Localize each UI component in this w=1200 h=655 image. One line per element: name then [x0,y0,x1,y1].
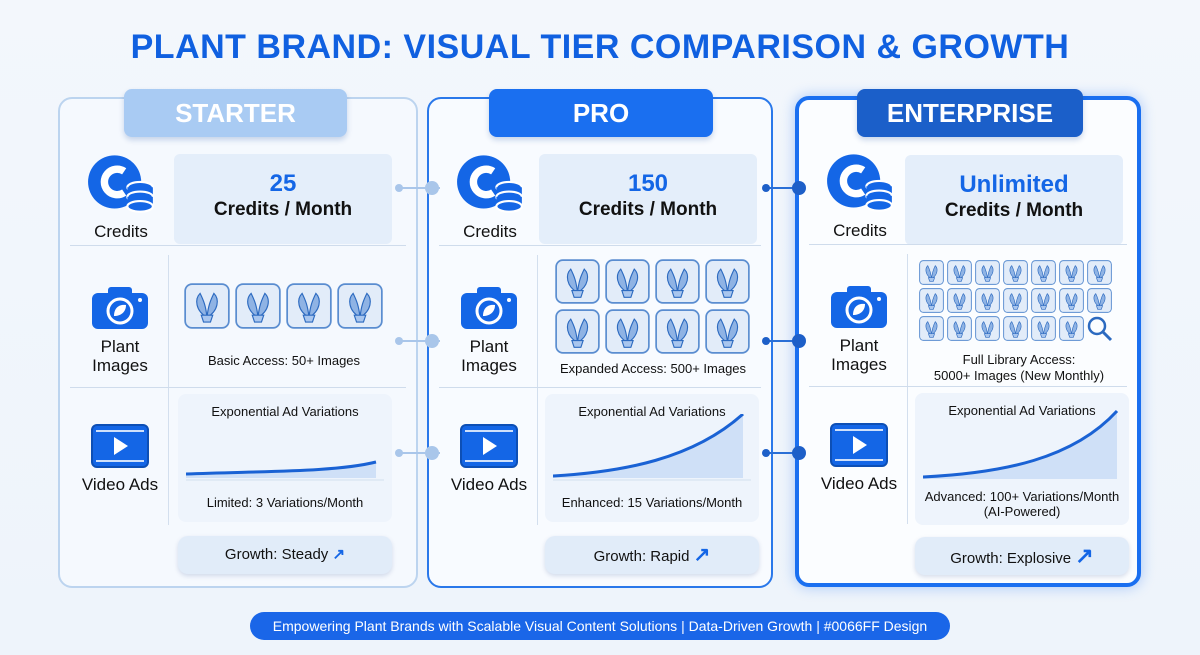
tab: enterprise: ENTERPRISE [887,98,1053,128]
connectors: pro to enterprise [762,181,806,460]
footer banner: Empowering Plant Brands with Scalable Visual Content Solutions | Data-Driven Growth | #0066FF Design [273,618,927,634]
growth: steady: Growth: Steady ↗ [225,546,345,563]
icon: credits [827,154,892,240]
icon: credits: Credits [463,222,517,241]
title: PLANT BRAND: VISUAL TIER COMPARISON & GROWTH [131,28,1069,66]
chart: limited: Limited: 3 Variations/Month [207,495,363,510]
icon: plant images [831,286,887,374]
icon: credits [457,155,522,241]
icon: video ads: Video Ads [451,475,527,494]
tab: starter [124,89,347,137]
chart: enhanced: Enhanced: 15 Variations/Month [562,495,742,510]
icon: plant images [461,287,517,375]
growth: explosive [915,537,1129,575]
icon: video ads: Video Ads [821,474,897,493]
value: 25 credits: Credits / Month [214,199,352,220]
icon: plant images: Images [92,356,148,375]
icon: credits [88,155,154,241]
value: 150 credits: Credits / Month [579,199,717,220]
value: 25 credits: 25 [270,170,296,197]
chart: advanced: Exponential Ad Variations [948,403,1096,418]
chart: limited [178,394,392,522]
chart: enhanced [545,394,759,522]
chart: advanced [915,393,1129,525]
footer banner [250,612,950,640]
icon: credits: Credits [833,221,887,240]
icon: video ads: Video Ads [82,475,158,494]
chart: advanced: Advanced: 100+ Variations/Month [925,489,1119,504]
chart: enhanced: Exponential Ad Variations [578,404,726,419]
value: unlimited credits [905,155,1123,245]
value: 150 credits: 150 [628,170,668,197]
image grid: full library [919,260,1112,383]
connectors: starter to pro [395,181,440,460]
icon: video ads [451,424,527,494]
icon: video ads [82,424,158,494]
tab: pro: PRO [573,98,629,128]
value: unlimited credits: Credits / Month [945,200,1083,221]
icon: video ads [821,423,897,493]
image grid: basic [184,283,383,368]
image grid: expanded: Expanded Access: 500+ Images [560,361,746,376]
growth: rapid [545,536,759,574]
growth: rapid: Growth: Rapid ↗ [594,544,710,566]
tab: enterprise [857,89,1083,137]
icon: plant images [92,287,148,375]
image grid: basic: Basic Access: 50+ Images [208,353,360,368]
image grid: expanded [555,259,750,376]
value: unlimited credits: Unlimited [959,171,1069,198]
tab: starter: STARTER [175,98,296,128]
chart: limited: Exponential Ad Variations [211,404,359,419]
icon: plant images: Plant [470,337,508,356]
chart: advanced: (AI-Powered) [984,504,1060,519]
panel: pro [427,97,773,588]
image grid: full library: 5000+ Images (New Monthly) [934,368,1104,383]
growth: explosive: Growth: Explosive ↗ [950,543,1094,568]
icon: plant images: Plant [101,337,139,356]
value: 25 credits [174,154,392,244]
panel: starter [58,97,418,588]
growth: steady [178,536,392,574]
value: 150 credits [539,154,757,244]
icon: plant images: Plant [840,336,878,355]
tab: pro [489,89,713,137]
icon: plant images: Images [461,356,517,375]
image grid: full library: Full Library Access: [963,352,1075,367]
panel: enterprise [795,96,1141,587]
icon: plant images: Images [831,355,887,374]
icon: credits: Credits [94,222,148,241]
